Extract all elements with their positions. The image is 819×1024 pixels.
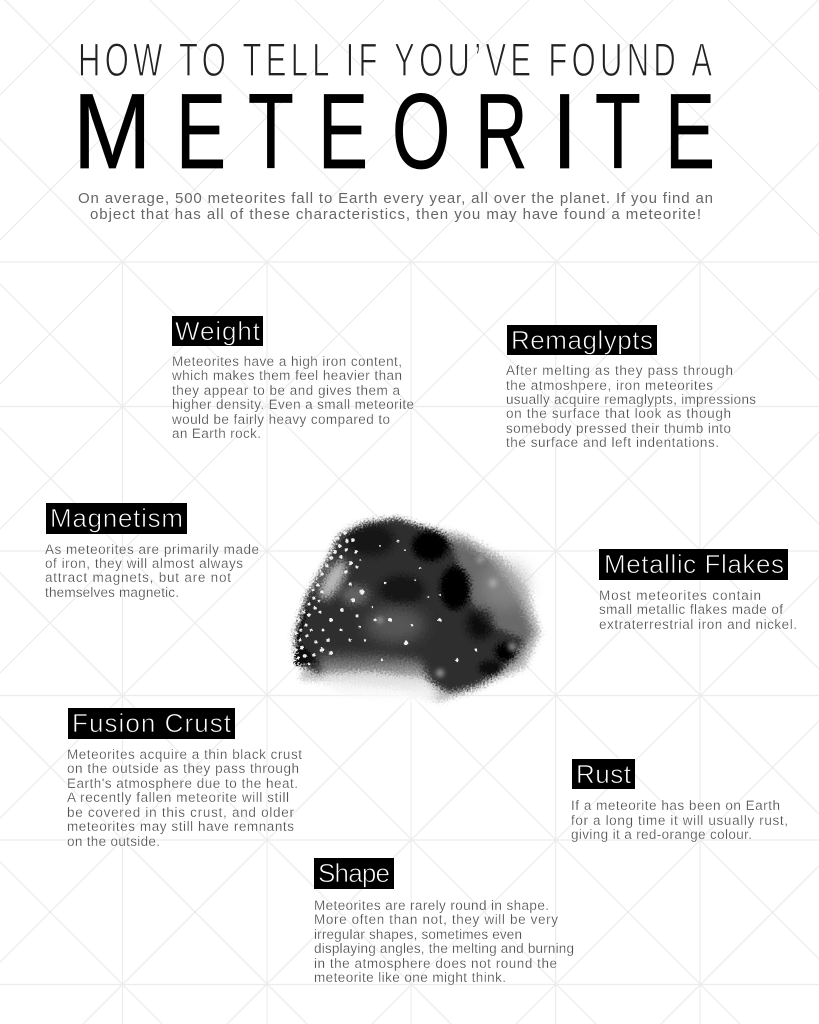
text: magnetism: themselves magnetic.	[45, 585, 179, 600]
main title: meteorite: M	[73, 71, 151, 191]
text: remaglypts: usually acquire remaglypts, impressions	[506, 392, 756, 407]
meteorite pale blotches	[377, 557, 516, 677]
text: metallic flakes: small metallic flakes made of	[599, 602, 783, 617]
text: magnetism: of iron, they will almost always	[45, 556, 243, 571]
text: magnetism	[45, 542, 259, 600]
text: shape: meteorite like one might think.	[314, 970, 506, 985]
text: shape: displaying angles, the melting and burning	[314, 941, 574, 956]
heading: metallic flakes: Metallic Flakes	[604, 549, 784, 579]
section: fusion crust	[67, 708, 302, 849]
text: shape	[314, 898, 574, 985]
text: shape: in the atmosphere does not round the	[314, 956, 557, 971]
main title: meteorite: E	[176, 71, 226, 191]
text: weight: an Earth rock.	[172, 426, 261, 441]
text: weight: which makes them feel heavier than	[171, 368, 402, 383]
text: fusion crust: meteorites may still have remnants	[67, 819, 294, 834]
text: remaglypts: on the surface that look as though	[506, 406, 731, 421]
text: fusion crust: Earth's atmosphere due to the heat.	[67, 776, 298, 791]
section: magnetism	[45, 503, 259, 600]
heading: shape: Shape	[318, 858, 390, 888]
meteorite speckles	[292, 531, 478, 666]
text: weight: higher density. Even a small meteorite	[172, 397, 414, 412]
text: metallic flakes: Most meteorites contain	[599, 588, 761, 603]
text: shape: More often than not, they will be very	[314, 912, 558, 927]
main title: meteorite	[73, 71, 715, 191]
main title: meteorite: I	[552, 71, 577, 191]
text: fusion crust: on the outside as they pass through	[67, 761, 299, 776]
section: remaglypts	[506, 325, 756, 450]
text: rust: giving it a red-orange colour.	[571, 827, 752, 842]
text: metallic flakes	[599, 588, 797, 632]
main title: meteorite: T	[248, 71, 294, 191]
text: metallic flakes: extraterrestrial iron and nickel.	[599, 617, 797, 632]
text: rust	[571, 798, 788, 842]
intro text: On average, 500 meteorites fall to Earth every year, all over the planet. If you find an	[78, 190, 713, 207]
text: magnetism: As meteorites are primarily made	[45, 542, 259, 557]
text: rust: for a long time it will usually rust,	[571, 813, 788, 828]
text: remaglypts: somebody pressed their thumb into	[506, 421, 731, 436]
section: weight	[171, 316, 414, 441]
main title: meteorite: R	[475, 71, 528, 191]
text: fusion crust: A recently fallen meteorite will still	[67, 790, 289, 805]
heading: magnetism: Magnetism	[50, 503, 183, 533]
heading: remaglypts: Remaglypts	[511, 325, 653, 355]
text: remaglypts: the atmoshpere, iron meteorites	[506, 378, 713, 393]
text: weight: Meteorites have a high iron content,	[172, 354, 402, 369]
heading: fusion crust: Fusion Crust	[72, 708, 232, 738]
main title: how to tell: HOW TO TELL IF YOU’VE FOUND A	[78, 35, 712, 87]
text: fusion crust	[67, 747, 302, 849]
text: remaglypts	[506, 363, 756, 450]
section: shape	[314, 858, 574, 985]
text: fusion crust: be covered in this crust, and older	[67, 805, 294, 820]
text: weight	[171, 354, 414, 441]
text: shape: irregular shapes, sometimes even	[314, 927, 522, 942]
text: remaglypts: the surface and left indentations.	[506, 435, 719, 450]
illustration: meteorite rock	[292, 518, 541, 702]
main title: meteorite: T	[595, 71, 641, 191]
intro text: object that has all of these characteristics, then you may have found a meteorite!	[90, 206, 701, 223]
section: metallic flakes	[599, 549, 797, 632]
text: fusion crust: Meteorites acquire a thin black crust	[67, 747, 302, 762]
heading: rust: Rust	[576, 759, 632, 789]
intro text	[78, 190, 713, 223]
text: fusion crust: on the outside.	[67, 834, 160, 849]
text: weight: would be fairly heavy compared to	[171, 412, 390, 427]
main title: meteorite: O	[392, 71, 450, 191]
section: rust	[571, 759, 788, 842]
text: rust: If a meteorite has been on Earth	[571, 798, 780, 813]
heading: weight: Weight	[175, 316, 261, 346]
text: weight: they appear to be and gives them a	[172, 383, 400, 398]
main title: meteorite: E	[318, 71, 368, 191]
text: magnetism: attract magnets, but are not	[45, 570, 231, 585]
text: remaglypts: After melting as they pass through	[506, 363, 733, 378]
main title: meteorite: E	[665, 71, 715, 191]
text: shape: Meteorites are rarely round in shape.	[314, 898, 549, 913]
